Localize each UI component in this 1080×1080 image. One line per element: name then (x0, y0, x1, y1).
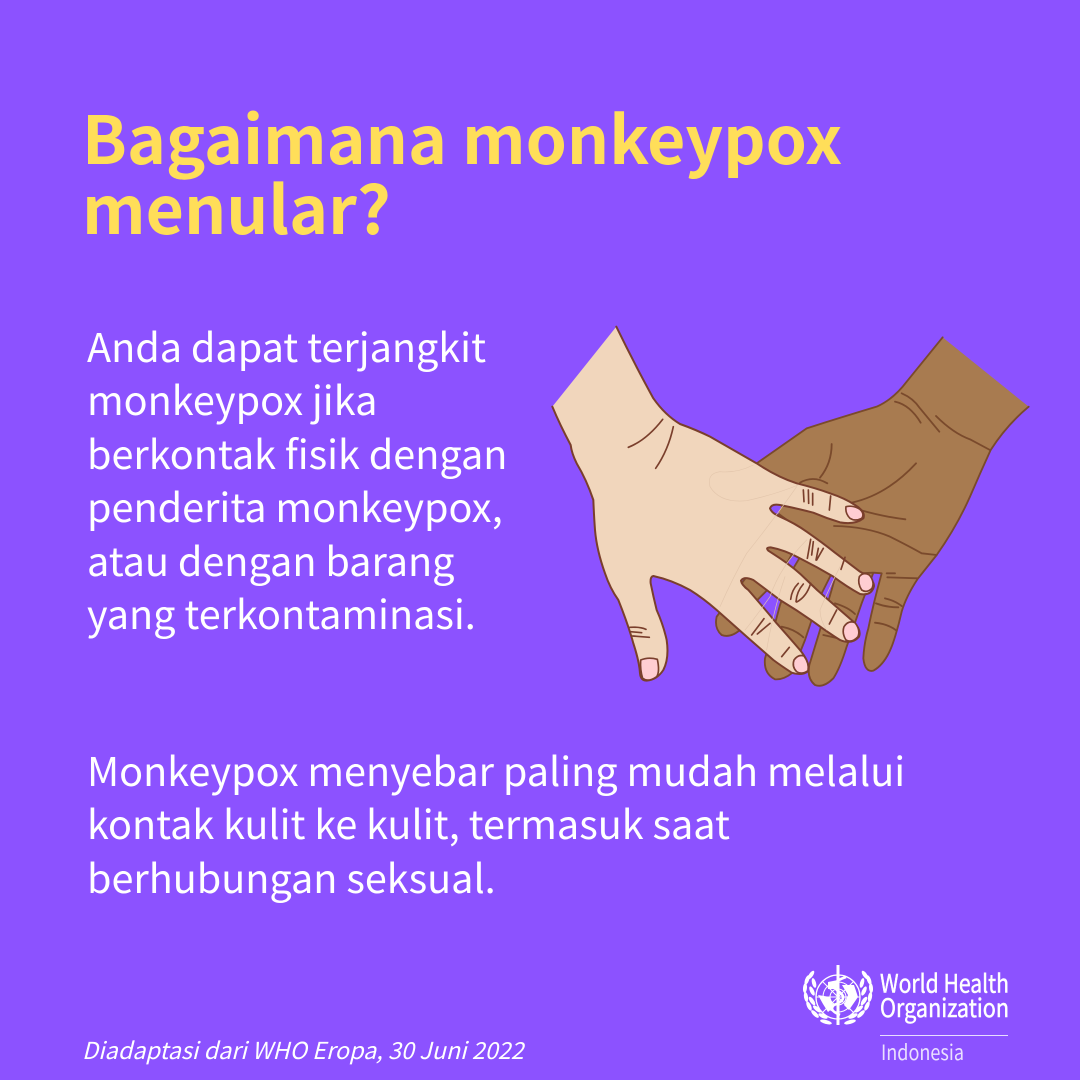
text block: how you can catch monkeypox: Anda dapat terjangkit (87, 317, 486, 374)
text block: skin to skin contact (87, 741, 905, 905)
logo: World Health Organization Indonesia (803, 964, 1009, 1067)
title: menular? (82, 158, 391, 254)
title (82, 88, 842, 254)
creases (902, 393, 939, 432)
icon: darker hand (716, 337, 1029, 686)
title: Bagaimana monkeypox (82, 88, 842, 184)
nails (641, 658, 659, 680)
icon: WHO emblem (803, 965, 873, 1025)
text block: how you can catch monkeypox: penderita monkeypox, (87, 477, 503, 534)
text block: how you can catch monkeypox: yang terkontaminasi. (87, 584, 476, 641)
creases (628, 419, 845, 657)
text block: how you can catch monkeypox: atau dengan barang (87, 531, 454, 588)
icon: lighter hand (552, 327, 874, 681)
logo text: country: Indonesia (881, 1037, 964, 1067)
text block: how you can catch monkeypox: berkontak fisik dengan (87, 424, 507, 481)
illustration: two hands holding (551, 326, 1030, 687)
source note: Diadaptasi dari WHO Eropa, 30 Juni 2022 (82, 1032, 524, 1066)
text block: skin to skin contact: berhubungan seksual. (87, 848, 496, 905)
purple gap by first finger (770, 505, 782, 514)
text block: skin to skin contact: Monkeypox menyebar paling mudah melalui (87, 741, 905, 798)
faint veins (709, 465, 840, 650)
text block: how you can catch monkeypox: monkeypox jika (87, 370, 377, 427)
text block: how you can catch monkeypox (87, 317, 507, 641)
text block: skin to skin contact: kontak kulit ke kulit, termasuk saat (87, 794, 730, 851)
